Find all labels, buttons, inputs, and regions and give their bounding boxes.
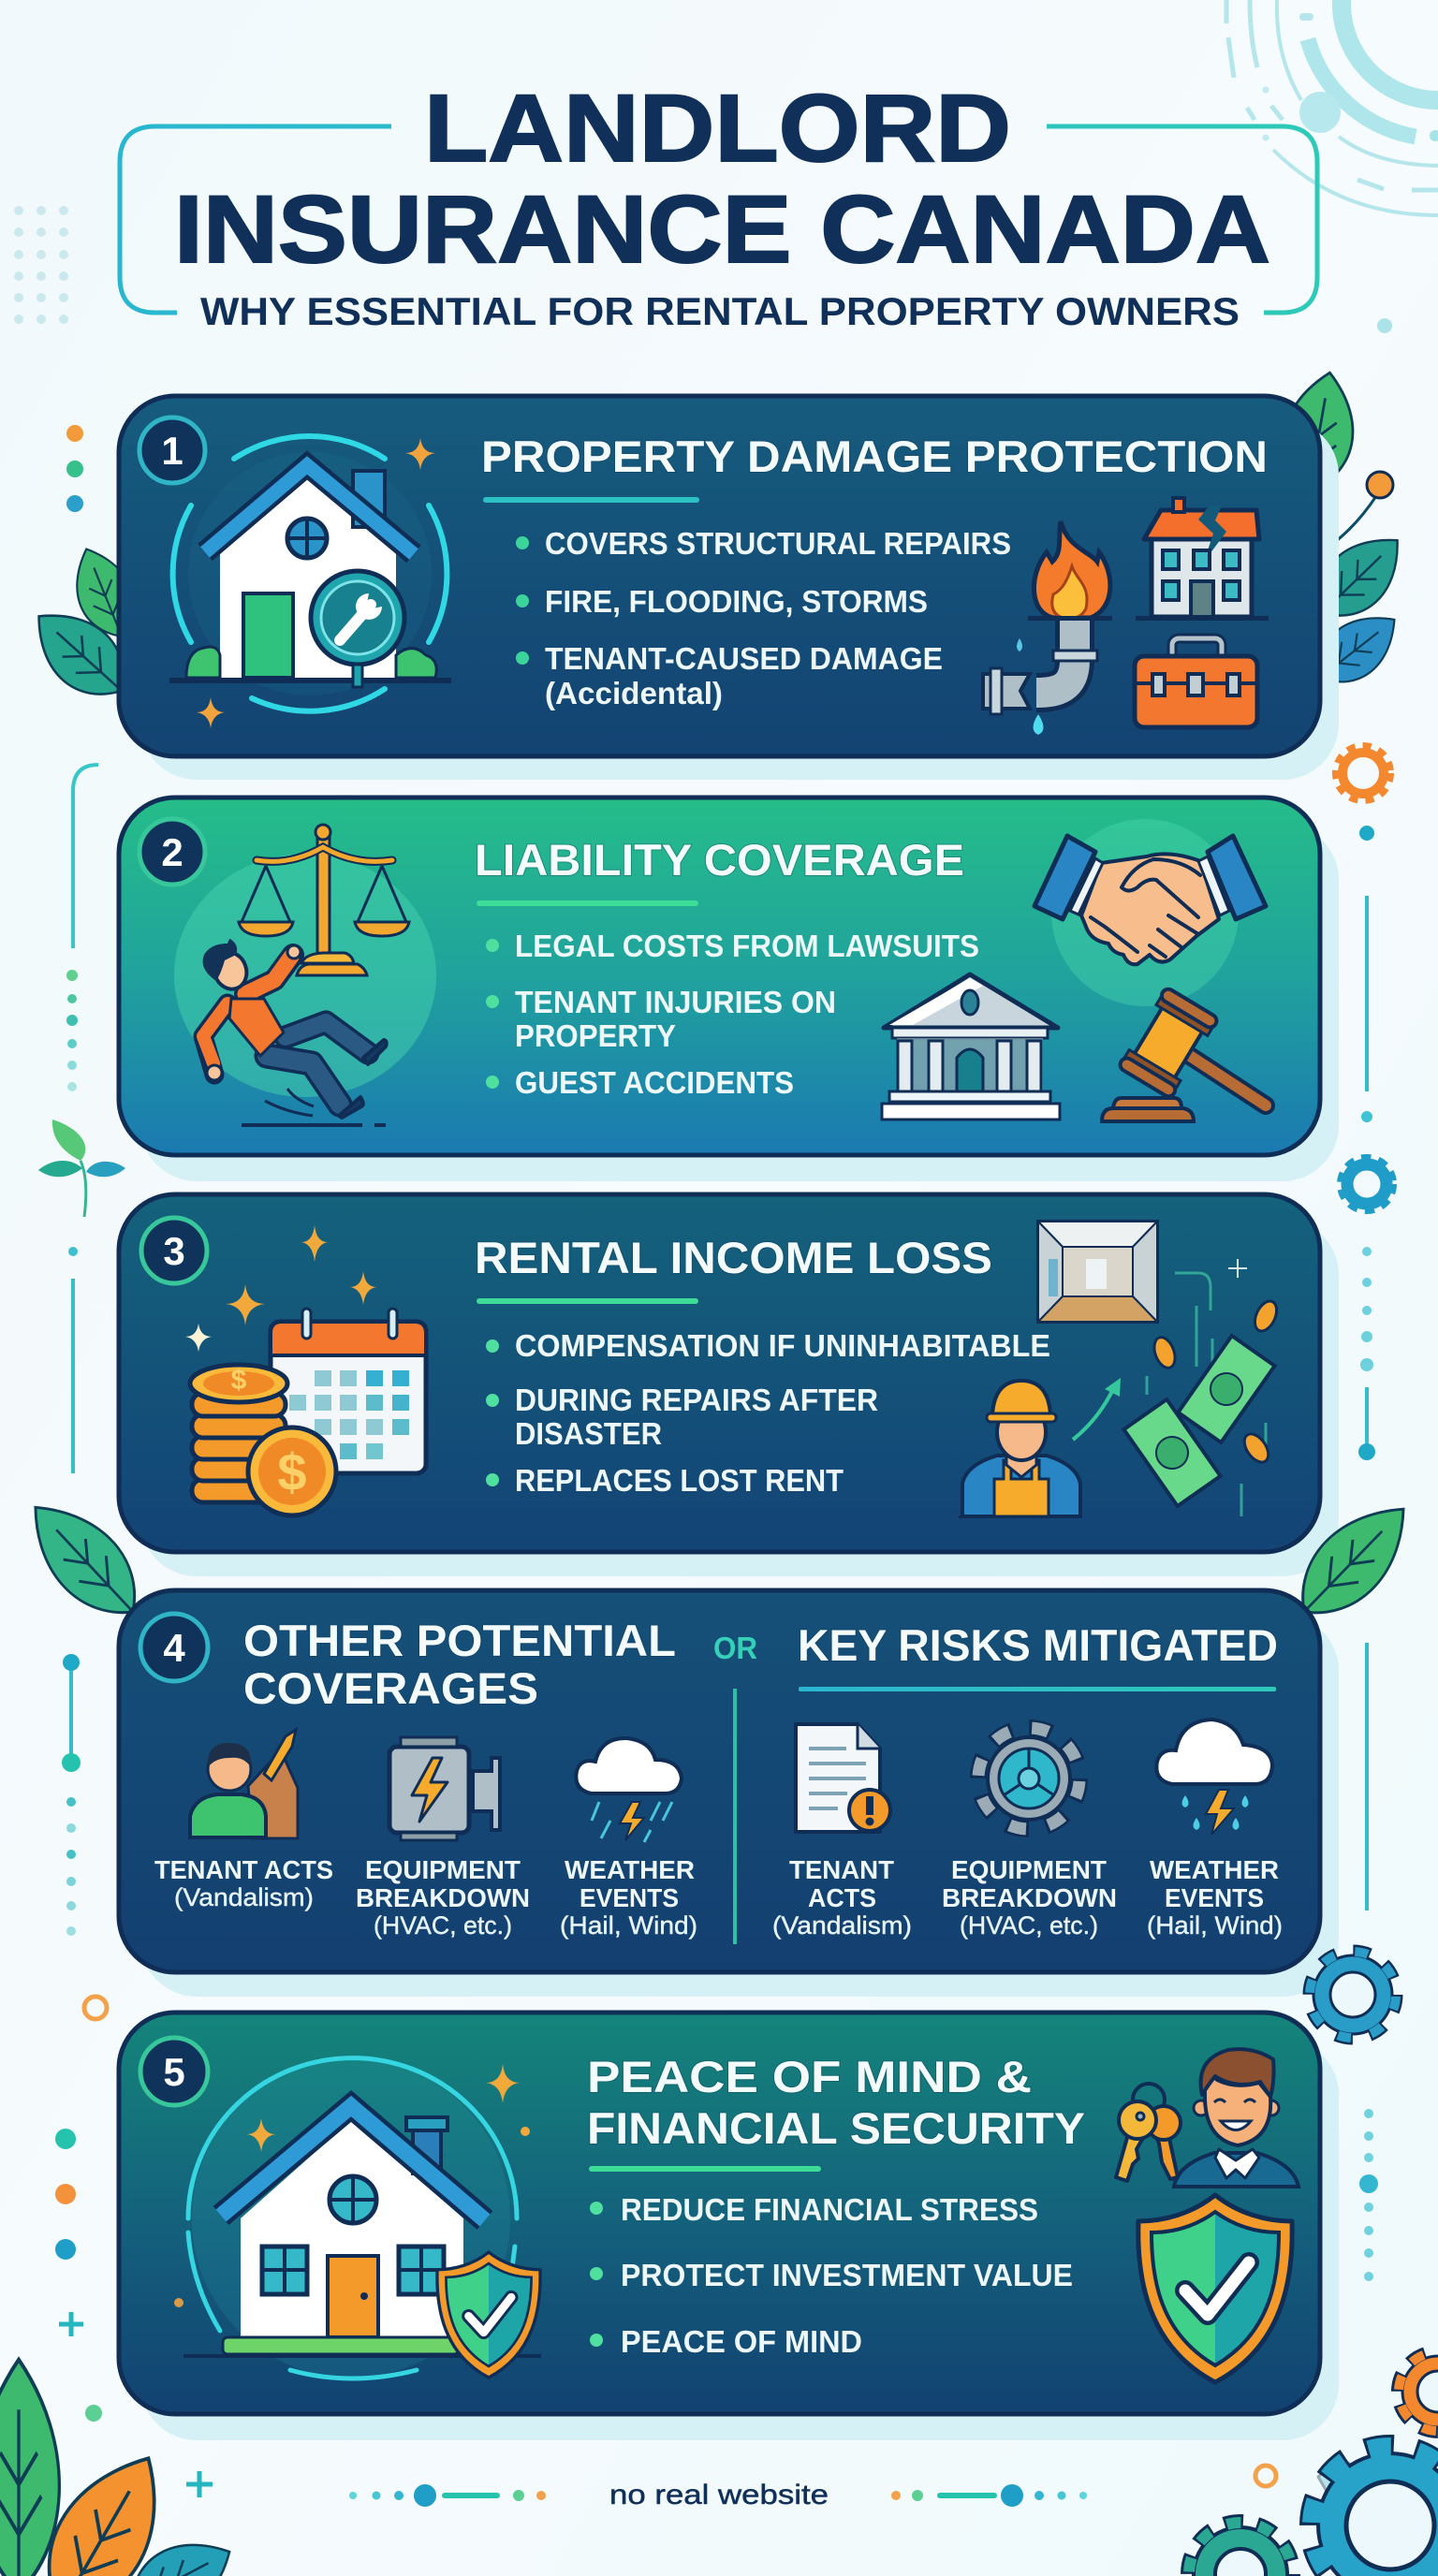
labels right: (Hail, Wind) bbox=[1147, 1911, 1283, 1939]
bullet list: PROPERTY bbox=[515, 1018, 676, 1053]
icon: document warning bbox=[796, 1724, 890, 1832]
icon: protected house bbox=[183, 2058, 541, 2378]
icon: gear bbox=[978, 1728, 1079, 1829]
footer text: no real website bbox=[609, 2480, 829, 2510]
heading left: OTHER POTENTIAL bbox=[243, 1616, 676, 1665]
icon: weather right bbox=[1156, 1720, 1272, 1835]
decoration: dot grid left bbox=[14, 206, 1392, 333]
labels right: WEATHER bbox=[1150, 1855, 1279, 1884]
decoration: bottom scattered elements bbox=[0, 2109, 1438, 2576]
sprout bbox=[38, 1120, 125, 1217]
coin dollar glyphs: $ bbox=[277, 1442, 307, 1501]
heading right bbox=[798, 1620, 1278, 1691]
panel 5: peace of mind bbox=[119, 2012, 1339, 2440]
labels left: BREAKDOWN bbox=[356, 1883, 530, 1912]
heading left bbox=[243, 1616, 676, 1713]
footer dots right bbox=[891, 2484, 1087, 2507]
title line 2: INSURANCE CANADA bbox=[174, 176, 1270, 283]
title line 1: LANDLORD bbox=[424, 75, 1011, 182]
icon: toolbox bbox=[1135, 638, 1257, 727]
panel 4: other coverages and key risks bbox=[119, 1590, 1339, 1997]
number badge 4: 4 bbox=[163, 1626, 185, 1670]
bullet list bbox=[516, 526, 1011, 710]
or divider bbox=[713, 1631, 757, 1944]
panel 3: rental income loss bbox=[119, 1194, 1339, 1576]
icon: empty room bbox=[1038, 1222, 1157, 1322]
bullet list: LEGAL COSTS FROM LAWSUITS bbox=[515, 929, 979, 963]
number badge 5 bbox=[140, 2038, 208, 2105]
bottom-left leaves bbox=[0, 2360, 244, 2576]
icon: money flying away bbox=[1073, 1259, 1281, 1516]
icon: gavel bbox=[1102, 987, 1266, 1121]
labels left: TENANT ACTS bbox=[154, 1855, 333, 1884]
footer bbox=[349, 2480, 1087, 2510]
sparkles bbox=[185, 1225, 376, 1352]
bullet list: GUEST ACCIDENTS bbox=[515, 1065, 794, 1100]
icon: worker bbox=[959, 1381, 1082, 1518]
icon: fire on burst pipe bbox=[983, 521, 1112, 735]
coin dollar glyphs bbox=[231, 1365, 307, 1501]
icon: calendar bbox=[271, 1309, 426, 1473]
bullet list: TENANT INJURIES ON bbox=[515, 985, 836, 1019]
number badge 3: 3 bbox=[163, 1229, 185, 1273]
labels right: ACTS bbox=[808, 1883, 876, 1912]
labels left: WEATHER bbox=[565, 1855, 695, 1884]
icon: smiling man bbox=[1174, 2049, 1299, 2187]
number badge 1: 1 bbox=[161, 429, 183, 473]
bullet list: REDUCE FINANCIAL STRESS bbox=[621, 2192, 1038, 2227]
bullet list: COVERS STRUCTURAL REPAIRS bbox=[545, 526, 1011, 561]
icon: cracked building bbox=[1136, 498, 1269, 621]
heading: PROPERTY DAMAGE PROTECTION bbox=[481, 432, 1268, 481]
orange gear right bbox=[1399, 2352, 1438, 2431]
subtitle: WHY ESSENTIAL FOR RENTAL PROPERTY OWNERS bbox=[200, 289, 1240, 333]
icon: equipment left bbox=[389, 1737, 500, 1840]
coin dollar glyphs: $ bbox=[231, 1365, 247, 1396]
bullet list: PROTECT INVESTMENT VALUE bbox=[621, 2258, 1073, 2292]
labels right: (HVAC, etc.) bbox=[960, 1911, 1098, 1939]
decoration: concentric arcs top right bbox=[1226, 0, 1438, 215]
sparkles bbox=[174, 2064, 530, 2307]
icon: large shield bbox=[1138, 2195, 1292, 2382]
number badge 3 bbox=[141, 1218, 207, 1283]
labels right: BREAKDOWN bbox=[942, 1883, 1117, 1912]
sparkles bbox=[197, 438, 435, 728]
footer dots left bbox=[349, 2484, 546, 2507]
decoration: side elements panel 1 bbox=[18, 367, 1417, 714]
blue gear right bbox=[1310, 1952, 1396, 2038]
number badge 5: 5 bbox=[163, 2050, 185, 2094]
heading: FINANCIAL SECURITY bbox=[587, 2103, 1085, 2153]
icon: coin stack bbox=[190, 1365, 336, 1515]
blue gear large bbox=[1312, 2447, 1438, 2576]
labels left: (Vandalism) bbox=[174, 1883, 314, 1911]
title frame bbox=[120, 126, 1317, 313]
labels right: EQUIPMENT bbox=[951, 1855, 1107, 1884]
heading: PEACE OF MIND & bbox=[587, 2052, 1032, 2101]
labels right bbox=[772, 1855, 1283, 1939]
decoration: sprout, blue gear and rails bbox=[38, 1120, 1393, 1473]
number badge 1 bbox=[139, 417, 205, 483]
title block bbox=[120, 75, 1317, 333]
bullet list bbox=[486, 929, 979, 1100]
icon: house with wrench bbox=[169, 436, 451, 711]
green gear bbox=[1189, 2523, 1292, 2576]
bullet list: COMPENSATION IF UNINHABITABLE bbox=[515, 1328, 1050, 1363]
heading: RENTAL INCOME LOSS bbox=[475, 1233, 992, 1282]
labels left: (Hail, Wind) bbox=[560, 1911, 697, 1939]
bullet list: DISASTER bbox=[515, 1416, 662, 1451]
decoration: large leaves between panels 3 and 4 bbox=[11, 1485, 1428, 1635]
decoration: left rail and right rail 1-2 bbox=[66, 746, 1390, 1122]
icon: falling person bbox=[203, 939, 387, 1127]
icon: courthouse bbox=[882, 974, 1060, 1120]
panel 2: liability coverage bbox=[119, 798, 1339, 1181]
grey gear bbox=[1318, 2457, 1378, 2504]
labels right: TENANT bbox=[789, 1855, 894, 1884]
icon: scales of justice bbox=[174, 825, 436, 1097]
icon: weather left bbox=[576, 1738, 682, 1842]
labels left: EVENTS bbox=[580, 1883, 679, 1912]
labels left bbox=[154, 1855, 697, 1939]
heading right: KEY RISKS MITIGATED bbox=[798, 1620, 1278, 1670]
orange gear bbox=[1336, 746, 1390, 800]
number badge 2: 2 bbox=[161, 830, 183, 874]
heading bbox=[587, 2052, 1085, 2172]
bullet list: PEACE OF MIND bbox=[621, 2324, 862, 2359]
blue gear bbox=[1341, 1158, 1393, 1210]
labels right: (Vandalism) bbox=[772, 1911, 912, 1939]
labels left: EQUIPMENT bbox=[365, 1855, 521, 1884]
bullet list: TENANT-CAUSED DAMAGE bbox=[545, 641, 943, 676]
bullet list: DURING REPAIRS AFTER bbox=[515, 1383, 878, 1417]
labels left: (HVAC, etc.) bbox=[374, 1911, 512, 1939]
bullet list: REPLACES LOST RENT bbox=[515, 1463, 844, 1498]
icon: handshake bbox=[1034, 819, 1266, 1006]
bullet list: (Accidental) bbox=[545, 676, 723, 710]
heading: LIABILITY COVERAGE bbox=[475, 835, 964, 885]
icon: tenant acts bbox=[190, 1730, 298, 1838]
labels right: EVENTS bbox=[1165, 1883, 1264, 1912]
icon: keys bbox=[1116, 2084, 1181, 2181]
number badge 2 bbox=[139, 819, 205, 885]
heading left: COVERAGES bbox=[243, 1663, 538, 1713]
number badge 4 bbox=[140, 1614, 208, 1681]
panel 1: property damage protection bbox=[119, 396, 1339, 780]
decoration: rails around panel 4 bbox=[62, 1643, 1396, 2038]
bullet list: FIRE, FLOODING, STORMS bbox=[545, 584, 928, 619]
bullet list bbox=[590, 2192, 1073, 2359]
bullet list bbox=[486, 1328, 1050, 1498]
or divider: OR bbox=[713, 1631, 757, 1665]
